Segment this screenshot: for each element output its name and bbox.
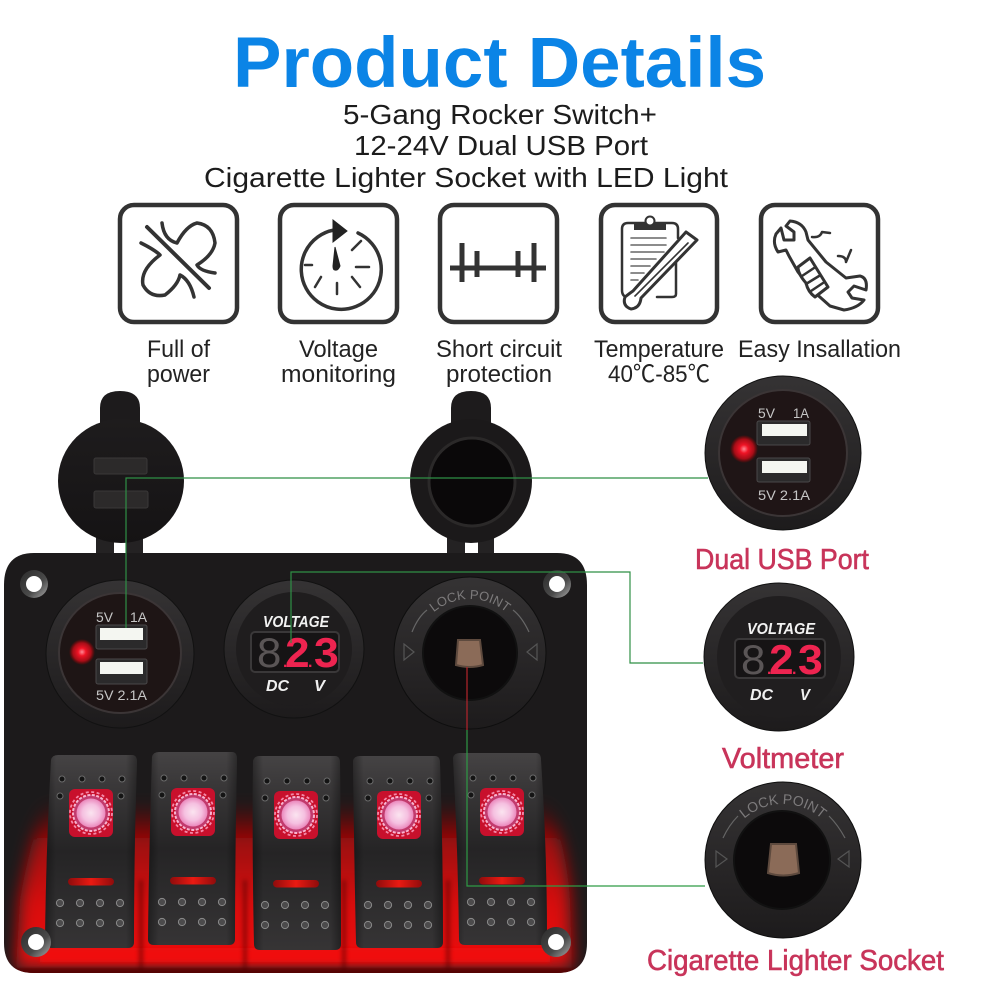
rocker switches bbox=[45, 752, 547, 950]
feature labels: Easy Insallation bbox=[738, 336, 901, 363]
detail: voltmeter: DC bbox=[750, 687, 773, 704]
red underglow bbox=[0, 805, 591, 976]
subtitle bbox=[204, 99, 728, 193]
icon: short circuit protection bbox=[440, 205, 557, 322]
lighter socket on panel bbox=[394, 576, 546, 730]
voltmeter on panel: 23 bbox=[284, 631, 339, 681]
voltmeter on panel: . bbox=[308, 654, 312, 671]
detail: USB port: 1A bbox=[793, 405, 810, 421]
mounting holes bbox=[20, 570, 571, 957]
voltmeter on panel: . bbox=[283, 654, 287, 671]
panel bbox=[0, 553, 591, 976]
icon: temperature bbox=[601, 205, 717, 322]
USB socket on panel: 1A bbox=[130, 609, 148, 625]
voltmeter on panel: V bbox=[314, 678, 326, 695]
detail: USB port: 5V bbox=[758, 405, 776, 421]
lighter dust cap bbox=[410, 391, 532, 590]
voltmeter on panel bbox=[224, 580, 364, 718]
icon: easy installation bbox=[761, 205, 878, 322]
rocker 5 bbox=[453, 753, 547, 945]
rocker 4 bbox=[353, 756, 443, 948]
icon: voltage monitoring bbox=[280, 205, 397, 322]
rocker 1 bbox=[45, 755, 137, 948]
feature labels: Temperature bbox=[594, 336, 724, 363]
title: Product Details bbox=[233, 24, 766, 103]
USB socket on panel bbox=[46, 580, 194, 728]
detail: voltmeter: V bbox=[800, 687, 811, 704]
detail: voltmeter: 8 bbox=[740, 638, 766, 688]
USB socket on panel: 5V bbox=[96, 609, 114, 625]
voltmeter on panel: DC bbox=[266, 678, 289, 695]
voltmeter on panel: 8 bbox=[256, 631, 282, 681]
detail: USB port: 5V 2.1A bbox=[758, 487, 811, 503]
feature labels: Short circuit bbox=[436, 336, 562, 363]
detail: voltmeter: VOLTAGE bbox=[747, 621, 816, 638]
USB dust cap bbox=[58, 391, 184, 590]
subtitle: 5-Gang Rocker Switch+ bbox=[343, 99, 657, 130]
detail: lighter socket: LOCK POINT bbox=[739, 794, 828, 818]
rocker 2 bbox=[148, 752, 237, 945]
USB socket on panel: 5V 2.1A bbox=[96, 687, 148, 703]
detail: lighter socket bbox=[704, 782, 862, 938]
label: Cigarette Lighter Socket: Cigarette Lighter Socket bbox=[647, 945, 944, 977]
label: Voltmeter: Voltmeter bbox=[722, 743, 844, 775]
detail: voltmeter bbox=[704, 583, 854, 731]
subtitle: Cigarette Lighter Socket with LED Light bbox=[204, 162, 728, 193]
voltmeter on panel: VOLTAGE bbox=[263, 614, 330, 631]
detail: voltmeter: 23 bbox=[768, 638, 823, 688]
feature labels: 40℃-85℃ bbox=[608, 361, 710, 388]
feature labels: power bbox=[147, 361, 210, 388]
rocker 3 bbox=[253, 756, 341, 950]
detail: USB port bbox=[705, 376, 861, 530]
feature labels: Full of bbox=[147, 336, 210, 363]
feature labels: protection bbox=[446, 361, 552, 388]
feature labels bbox=[147, 336, 901, 388]
label: Dual USB Port: Dual USB Port bbox=[695, 544, 869, 576]
connector lines bbox=[126, 478, 708, 886]
feature labels: monitoring bbox=[281, 361, 396, 388]
icon: full of power bbox=[120, 205, 237, 322]
lighter socket on panel: LOCK POINT bbox=[429, 590, 512, 612]
detail: voltmeter: . bbox=[767, 661, 771, 678]
detail: voltmeter: . bbox=[792, 661, 796, 678]
feature labels: Voltage bbox=[299, 336, 378, 363]
subtitle: 12-24V Dual USB Port bbox=[354, 130, 648, 161]
